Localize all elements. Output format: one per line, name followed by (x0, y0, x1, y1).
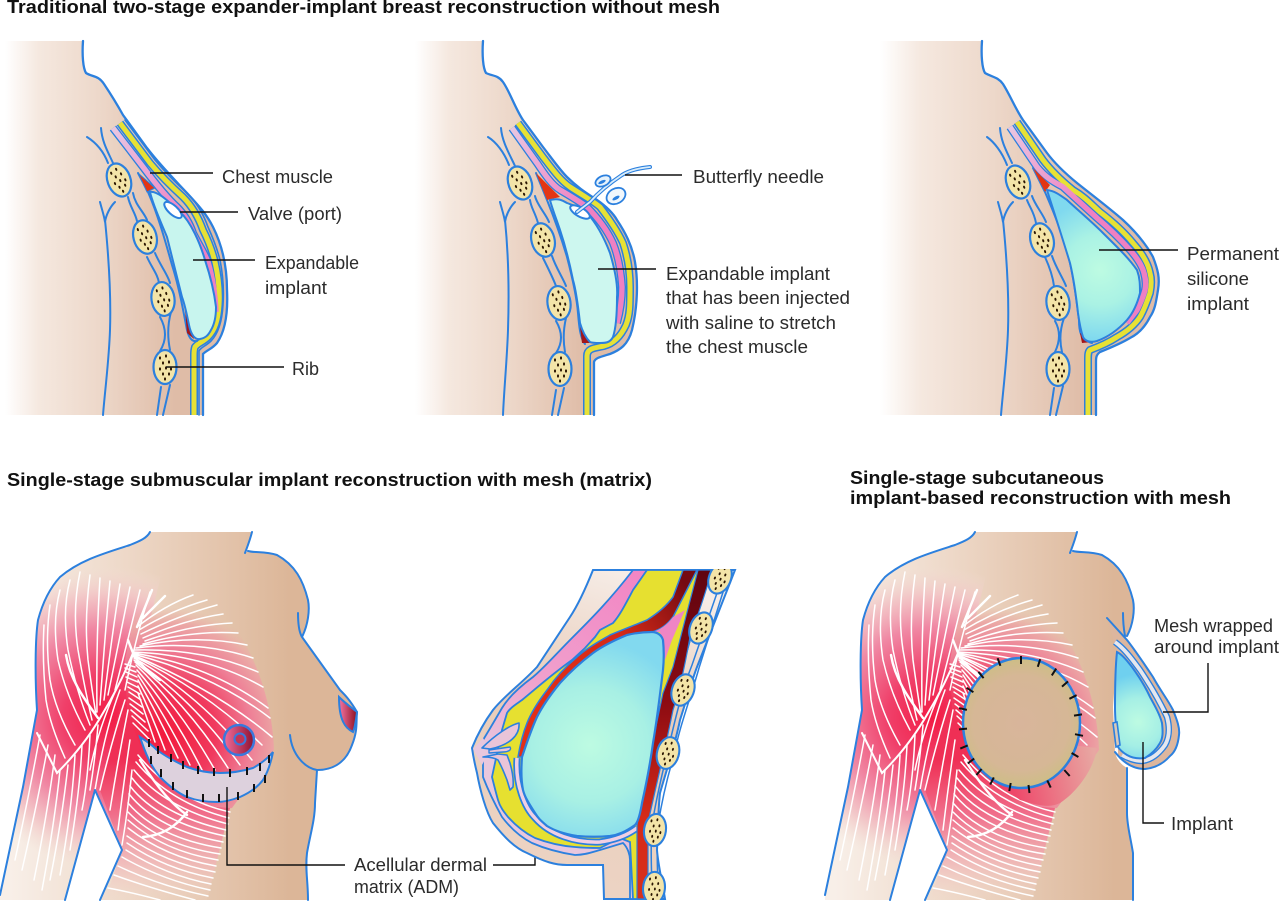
nipple profile (339, 697, 357, 732)
label: ADM: Acellular dermal (354, 855, 487, 875)
yellow fat layer (518, 123, 630, 415)
label lines (1143, 663, 1208, 823)
permanent silicone implant (1047, 190, 1140, 342)
sutures (959, 656, 1083, 793)
dark red muscle wedge (580, 327, 590, 343)
skin and chest wall (415, 41, 637, 415)
pink muscle layer (1010, 127, 1146, 323)
red muscle wedge (536, 173, 560, 200)
skin and chest wall (5, 41, 227, 415)
pale capsule band (517, 758, 637, 842)
pectoralis muscle (518, 570, 697, 757)
panel: torso with acellular dermal matrix (0, 532, 535, 900)
label lines (598, 175, 682, 269)
label: injected implant (665, 264, 850, 357)
body outline (982, 41, 1159, 415)
label: permanent silicone implant: silicone (1187, 269, 1249, 289)
label line (1099, 249, 1178, 251)
inner lung line (500, 202, 515, 415)
ribs (488, 128, 573, 415)
chest muscles (0, 560, 274, 900)
pink muscle layer (512, 128, 622, 323)
yellow fat layer (120, 123, 219, 415)
pink muscle layer (113, 128, 216, 312)
label: injected implant: with saline to stretch (665, 313, 836, 333)
body outline (83, 41, 227, 415)
torso skin (0, 532, 357, 900)
dark red muscle wedge (185, 310, 194, 339)
panel: stage one with expander (5, 41, 359, 415)
expandable implant with saline (550, 199, 617, 343)
title: subcutaneous (850, 468, 1231, 508)
panel: lateral cross-section with implant (472, 552, 745, 901)
yellow fat layer (492, 570, 700, 899)
side view: mesh tab (1113, 722, 1120, 747)
tissue lines (651, 570, 730, 899)
label: permanent silicone implant: implant (1187, 294, 1249, 314)
torso outline (0, 532, 357, 900)
side view: skin flap (1107, 618, 1179, 769)
label: implant: Implant (1171, 814, 1233, 834)
valve port (162, 199, 184, 221)
label: injected implant: that has been injected (666, 288, 850, 308)
label: mesh wrapped: Mesh wrapped (1154, 616, 1273, 636)
label: ADM: matrix (ADM) (354, 877, 459, 897)
blue edges of layers (1010, 122, 1151, 415)
torso outline (825, 532, 1134, 900)
pleura line (1033, 168, 1092, 343)
mask above and below section (570, 552, 745, 901)
red muscle wedge (138, 173, 155, 192)
label: butterfly needle: Butterfly needle (693, 167, 824, 187)
label: expandable implant: Expandable (265, 253, 359, 273)
pink wedge (652, 610, 685, 660)
chest wall muscle (637, 570, 712, 899)
inner lung line (100, 202, 115, 415)
label: expandable implant: implant (265, 278, 327, 298)
label: ADM (354, 855, 487, 897)
label: rib: Rib (292, 359, 319, 379)
blue edges of layers (512, 123, 630, 415)
dark red muscle wedge (1080, 333, 1093, 343)
chest muscles (825, 560, 1099, 900)
label: valve: Valve (port) (248, 204, 342, 224)
skin and chest wall (880, 41, 1159, 415)
milk ducts (473, 723, 519, 790)
outer skin layer (472, 570, 735, 899)
label: chest muscle: Chest muscle (222, 167, 333, 187)
ribs (87, 128, 177, 415)
torso skin (825, 532, 1134, 900)
ribs (642, 559, 736, 901)
title: subcutaneous: implant-based reconstruction with mesh (850, 488, 1231, 508)
red muscle wedge (1033, 168, 1050, 192)
pleura line (138, 173, 197, 341)
label: mesh wrapped: around implant (1154, 637, 1279, 657)
panel: stage two with saline injection (415, 41, 850, 415)
pink subdermal layer (483, 570, 705, 899)
implant cross-section (521, 632, 664, 837)
side view: implant (1115, 652, 1163, 758)
label: injected implant: the chest muscle (666, 337, 808, 357)
panel: stage three permanent implant (880, 41, 1279, 415)
label lines (150, 173, 284, 367)
panel: torso with mesh-wrapped implant (825, 532, 1279, 900)
sutures (149, 739, 269, 802)
label lines (227, 787, 535, 865)
yellow fat layer (1017, 122, 1151, 415)
second tissue line (125, 120, 223, 415)
ribs (987, 128, 1072, 415)
acellular dermal matrix (140, 737, 273, 802)
label: permanent silicone implant: Permanent (1187, 244, 1279, 264)
expandable implant (150, 192, 216, 339)
inner lung line (998, 202, 1013, 415)
title: subcutaneous: Single-stage subcutaneous (850, 468, 1104, 488)
valve port (568, 203, 592, 221)
label: mesh wrapped (1154, 616, 1279, 657)
lower muscle lobe (1000, 745, 1097, 806)
icon: butterfly needle (577, 167, 650, 212)
label: permanent silicone implant (1187, 244, 1279, 314)
side view: mesh band (1115, 642, 1169, 761)
body outline (483, 41, 637, 415)
label: expandable implant (265, 253, 359, 298)
pleura line (536, 173, 585, 344)
title: submuscular: Single-stage submuscular implant reconstruction with mesh (matrix) (7, 470, 652, 490)
areola (224, 725, 254, 755)
circular mesh (963, 658, 1080, 788)
blue edges of layers (113, 123, 219, 415)
label: injected implant: Expandable implant (666, 264, 830, 284)
